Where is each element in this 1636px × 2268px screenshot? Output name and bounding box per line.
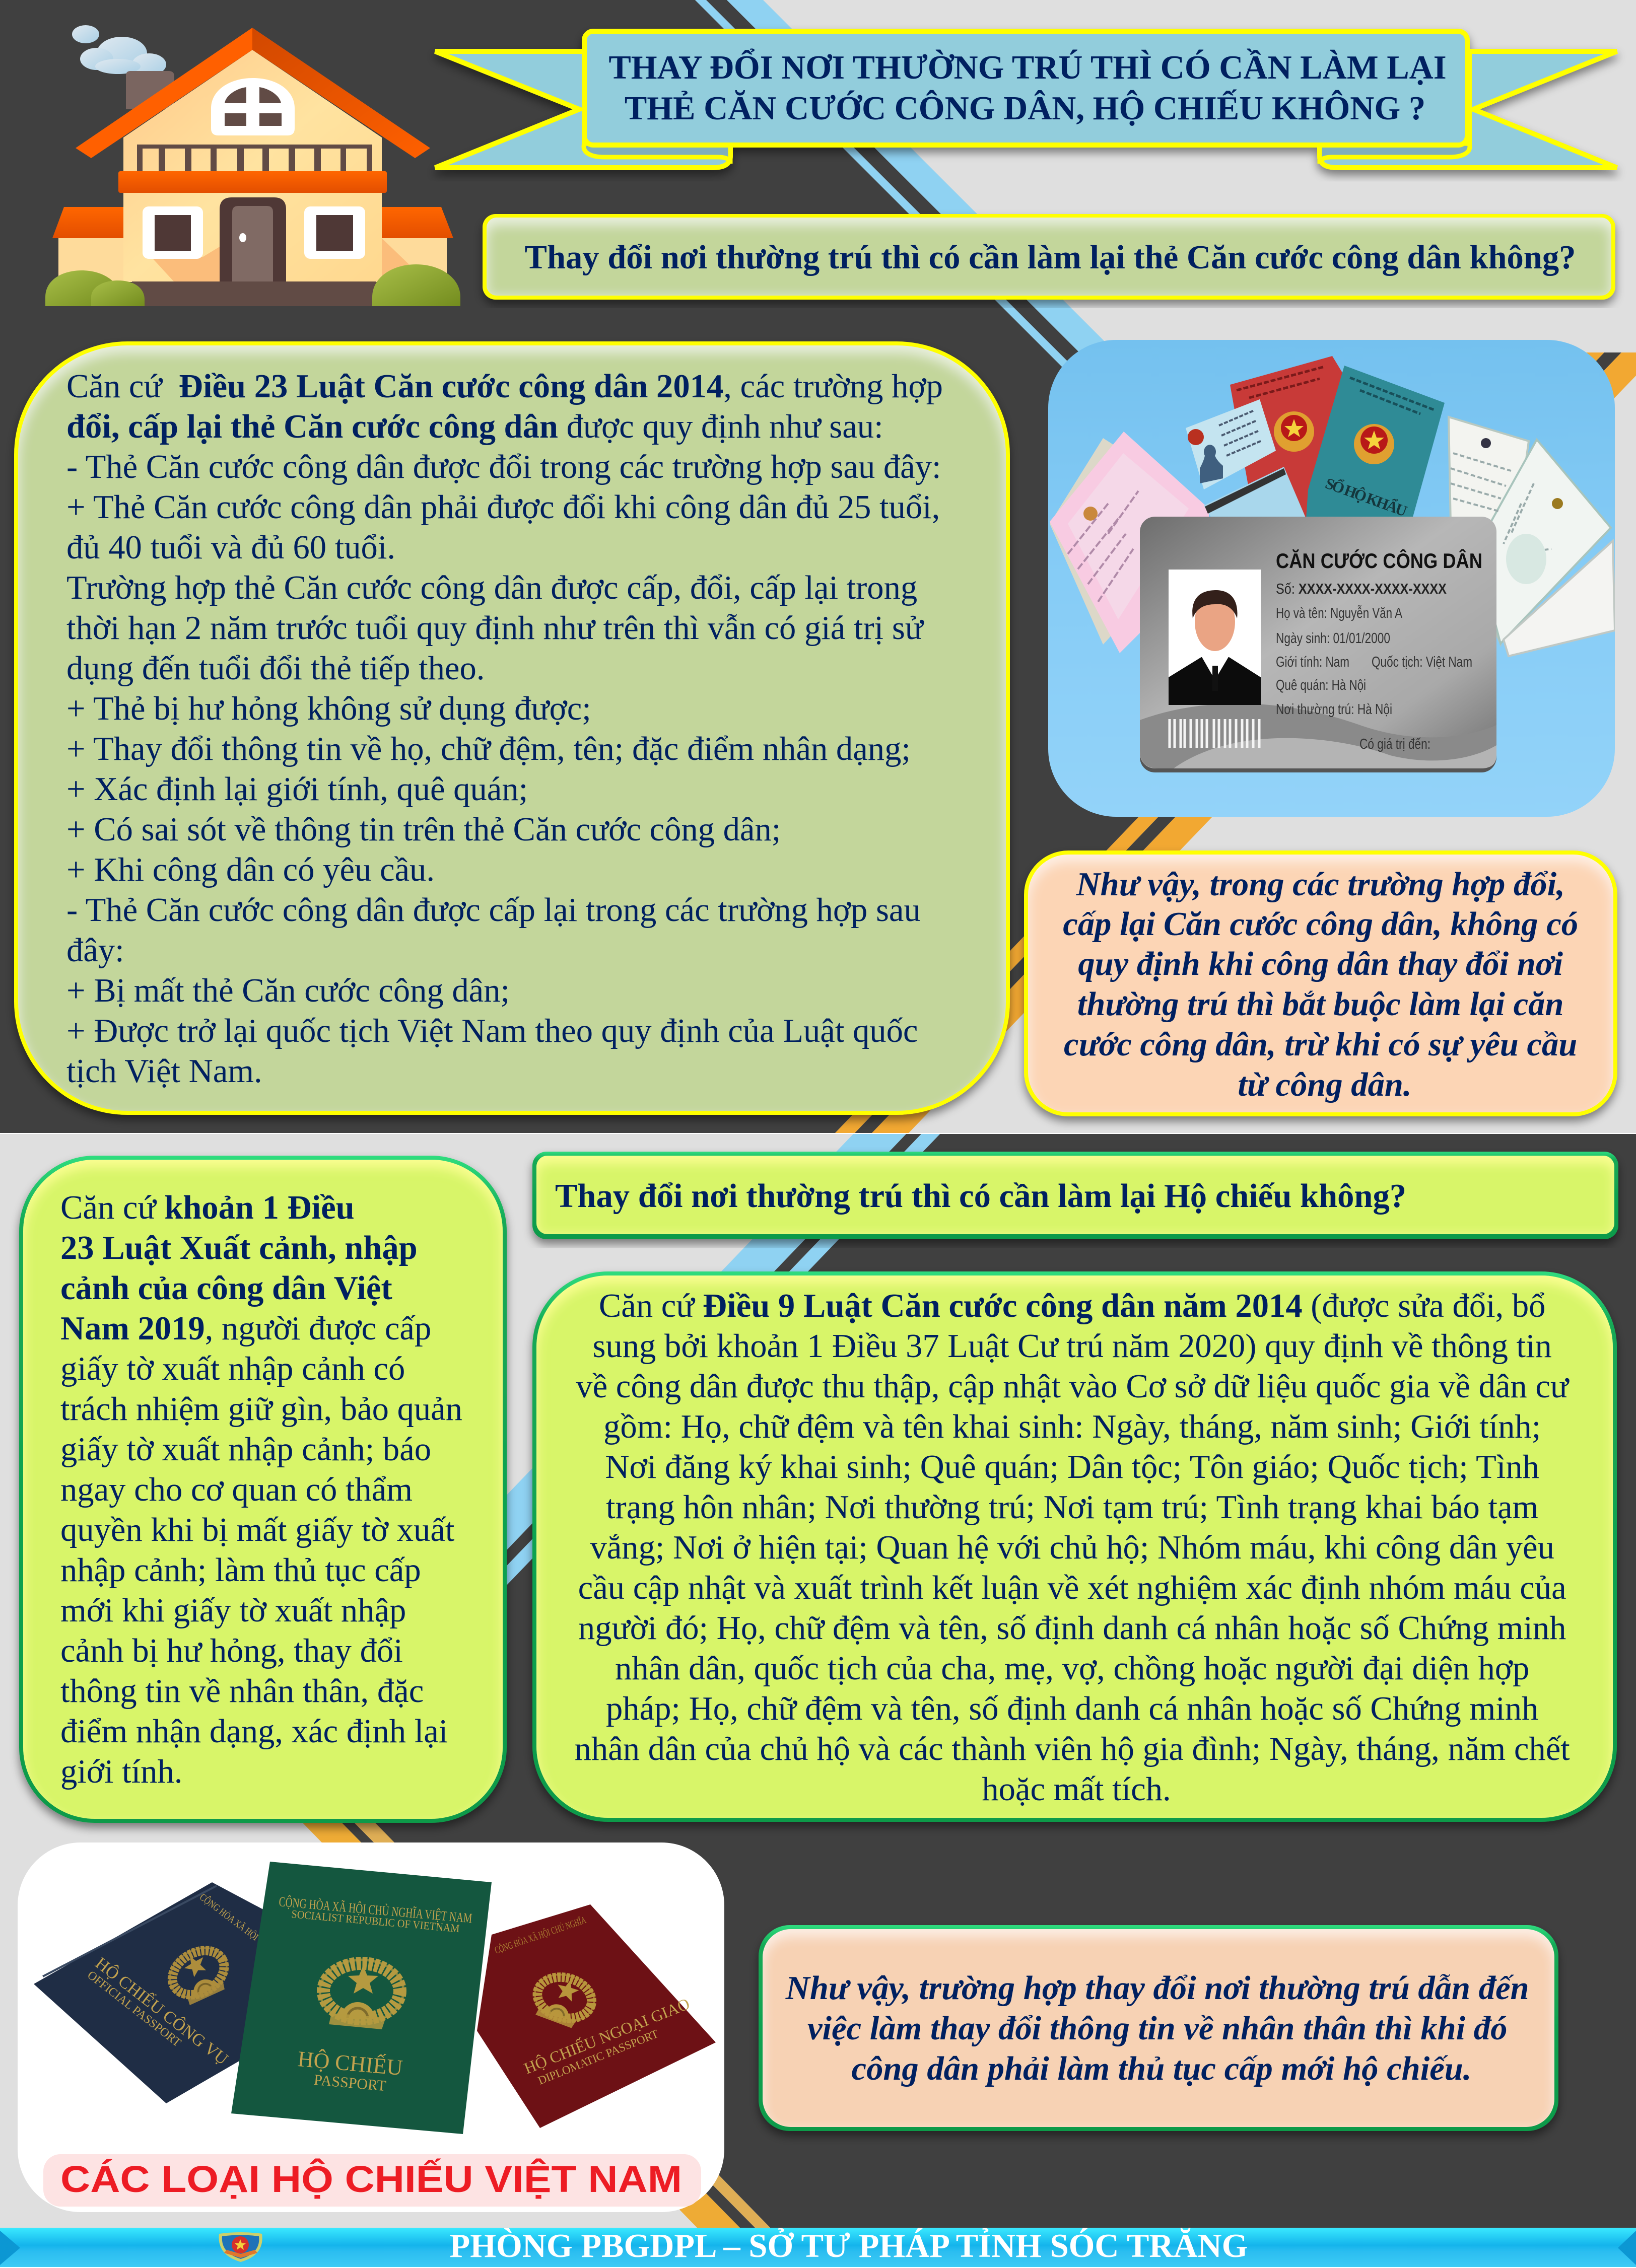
heading: question 1 [483,214,1615,300]
panel: data collected under Article 9: Căn cứ Điều 9 Luật Căn cước công dân năm 2014 (được sửa đổi, bổ [599,1288,1545,1324]
panel: data collected under Article 9: pháp; Họ, chữ đệm và tên, số định danh cá nhân hoặc số Chứng minh [606,1690,1538,1727]
icon: navy official passport: OFFICIAL PASSPORT [85,1968,183,2049]
icon: red diplomatic passport: HỘ CHIẾU NGOẠI GIAO [521,1995,692,2077]
panel: passport legal basis: cảnh bị hư hỏng, thay đổi [60,1633,403,1669]
panel: data collected under Article 9: cầu cập nhật và xuất trình kết luận về xét nghiệm xác định nhóm máu của [578,1570,1566,1606]
panel: data collected under Article 9: nhân dân của chủ hộ và các thành viên hộ gia đình; Ngày, tháng, năm chết [575,1731,1570,1767]
panel: passport legal basis: nhập cảnh; làm thủ tục cấp [60,1552,421,1589]
title text: THAY ĐỔI NƠI THƯỜNG TRÚ THÌ CÓ CẦN LÀM LẠI [608,48,1447,86]
panel: passport legal basis: ngay cho cơ quan có thẩm [60,1471,413,1508]
callout: ID card conclusion: Như vậy, trong các trường hợp đổi, [1076,866,1565,903]
icon: green ordinary passport: HỘ CHIẾU [297,2046,404,2080]
caption: passport types: CÁC LOẠI HỘ CHIẾU VIỆT NAM [60,2158,682,2200]
panel text: tịch Việt Nam. [66,1053,262,1090]
ID card text: Số: XXXX-XXXX-XXXX-XXXX [1276,581,1447,597]
icon: ID portrait [1169,570,1261,705]
heading: question 2 [532,1152,1618,1239]
icon: navy official passport [34,1882,267,2103]
panel text: + Thẻ bị hư hỏng không sử dụng được; [66,690,591,727]
panel: data collected under Article 9: hoặc mất tích. [982,1771,1171,1808]
ID card text: Quê quán: Hà Nội [1276,677,1366,693]
panel: passport legal basis: giới tính. [60,1753,182,1790]
panel: data collected under Article 9: gồm: Họ, chữ đệm và tên khai sinh: Ngày, tháng, năm sinh; Giới tính; [603,1408,1541,1445]
image: citizen ID card and documents [1048,340,1615,817]
panel text: + Bị mất thẻ Căn cước công dân; [66,972,510,1009]
ID card text: Quốc tịch: Việt Nam [1372,654,1472,670]
icon: green ordinary passport: CỘNG HÒA XÃ HỘI CHỦ NGHĨA VIỆT NAM [278,1894,473,1926]
heading: question 2: Thay đổi nơi thường trú thì có cần làm lại Hộ chiếu không? [555,1178,1406,1215]
panel: passport legal basis: thông tin về nhân thân, đặc [60,1673,424,1710]
callout: passport conclusion: công dân phải làm thủ tục cấp mới hộ chiếu. [852,2050,1471,2087]
panel text: thời hạn 2 năm trước tuổi quy định như trên thì vẫn có giá trị sử [66,610,924,647]
ID card text [1276,548,1482,752]
panel text: Trường hợp thẻ Căn cước công dân được cấp, đổi, cấp lại trong [66,570,917,606]
panel: passport legal basis: giấy tờ xuất nhập cảnh; báo [60,1431,431,1468]
icon: balcony railing [137,145,372,172]
panel: data collected under Article 9: về công dân được thu thập, cập nhật vào Cơ sở dữ liệu quốc gia về dân cư [576,1368,1570,1405]
callout: passport conclusion [759,1925,1558,2131]
icon: red diplomatic passport [477,1904,716,2128]
ID card text: Ngày sinh: 01/01/2000 [1276,630,1390,647]
panel: passport legal basis: điểm nhận dạng, xác định lại [60,1713,448,1750]
footer bar [0,2227,1636,2267]
panel: passport legal basis: mới khi giấy tờ xuất nhập [60,1592,406,1629]
callout: passport conclusion: việc làm thay đổi thông tin về nhân thân thì khi đó [807,2010,1507,2047]
panel: passport legal basis: giấy tờ xuất nhập cảnh có [60,1351,405,1387]
panel: passport legal basis: cảnh của công dân Việt [60,1270,392,1307]
panel text: dụng đến tuổi đổi thẻ tiếp theo. [66,650,485,687]
icon: bushes [45,264,460,306]
icon: door [220,197,286,281]
footer text: PHÒNG PBGDPL – SỞ TƯ PHÁP TỈNH SÓC TRĂNG [450,2227,1248,2264]
ID card text: Giới tính: Nam [1276,654,1349,670]
icon: police crest [219,2232,262,2262]
panel: data collected under Article 9: nhân dân, quốc tịch của cha, mẹ, vợ, chồng hoặc người đại diện hợp [615,1650,1529,1687]
callout: ID card conclusion [1024,851,1617,1116]
panel: data collected under Article 9: người đó; Họ, chữ đệm và tên, số định danh cá nhân hoặc số Chứng minh [578,1610,1566,1647]
icon: navy official passport: HỘ CHIẾU CÔNG VỤ [92,1953,232,2069]
panel: passport legal basis: Nam 2019, người được cấp [60,1310,431,1347]
icon: chimney smoke [72,25,166,76]
panel text: + Thẻ Căn cước công dân phải được đổi khi công dân đủ 25 tuổi, [66,489,940,526]
icon: green ordinary passport: SOCIALIST REPUBLIC OF VIETNAM [291,1907,460,1935]
panel: passport legal basis: quyền khi bị mất giấy tờ xuất [60,1512,455,1548]
callout: ID card conclusion: từ công dân. [1238,1067,1412,1103]
ID card text: Họ và tên: Nguyễn Văn A [1276,605,1403,621]
panel text: đây: [66,932,124,969]
panel: legal basis for ID card renewal [14,341,1010,1115]
icon: pink certificates [1050,432,1209,653]
icon: blue identity cards [1186,399,1306,519]
caption: passport types [43,2154,701,2207]
icon: teal household book [1306,366,1445,520]
title text [608,48,1447,127]
panel text: - Thẻ Căn cước công dân được cấp lại trong các trường hợp sau [66,892,921,929]
panel text: + Khi công dân có yêu cầu. [66,852,435,888]
ID card [1140,517,1496,772]
panel text: Căn cứ Điều 23 Luật Căn cước công dân 2014, các trường hợp [66,368,943,405]
panel text: + Thay đổi thông tin về họ, chữ đệm, tên; đặc điểm nhân dạng; [66,731,911,767]
icon: windows [143,206,365,259]
panel text: đủ 40 tuổi và đủ 60 tuổi. [66,529,395,566]
callout: ID card conclusion: thường trú thì bắt buộc làm lại căn [1077,986,1563,1023]
ID card text: CĂN CƯỚC CÔNG DÂN [1276,548,1482,573]
callout: passport conclusion: Như vậy, trường hợp thay đổi nơi thường trú dẫn đến [785,1970,1529,2007]
icon: barcode [1170,719,1259,748]
panel text: - Thẻ Căn cước công dân được đổi trong các trường hợp sau đây: [66,449,941,485]
panel: data collected under Article 9: vắng; Nơi ở hiện tại; Quan hệ với chủ hộ; Nhóm máu, khi công dân yêu [590,1529,1554,1566]
panel: passport legal basis: trách nhiệm giữ gìn, bảo quản [60,1391,462,1428]
panel: data collected under Article 9: sung bởi khoản 1 Điều 37 Luật Cư trú năm 2020) quy định về thông tin [593,1328,1552,1365]
panel: passport legal basis: 23 Luật Xuất cảnh, nhập [60,1230,418,1266]
callout: ID card conclusion: cấp lại Căn cước công dân, không có [1063,906,1578,943]
icon: navy official passport: CỘNG HÒA XÃ HỘI [197,1891,261,1943]
icon: red diplomatic passport: CỘNG HÒA XÃ HỘI CHỦ NGHĨA [493,1913,588,1956]
panel text: đổi, cấp lại thẻ Căn cước công dân được quy định như sau: [66,408,883,445]
panel text: + Xác định lại giới tính, quê quán; [66,771,528,808]
icon: white certificates [1449,417,1615,656]
panel: passport legal basis [19,1156,507,1823]
image: Vietnamese passports [18,1842,724,2212]
panel: data collected under Article 9 [532,1271,1617,1822]
icon: green ordinary passport [231,1862,492,2134]
heading: question 1: Thay đổi nơi thường trú thì có cần làm lại thẻ Căn cước công dân không? [525,239,1576,276]
icon: attic window [211,78,295,135]
panel: data collected under Article 9: trạng hôn nhân; Nơi thường trú; Nơi tạm trú; Tình trạng khai báo tạm [606,1489,1538,1526]
title ribbon [435,31,1617,168]
icon: red diplomatic passport: DIPLOMATIC PASSPORT [536,2027,660,2087]
ID card text: Nơi thường trú: Hà Nội [1276,701,1392,718]
icon: house illustration [45,25,460,306]
panel text: + Có sai sót về thông tin trên thẻ Căn cước công dân; [66,811,781,848]
icon: red household book [1230,356,1344,519]
icon: teal household book: SỔ HỘ KHẨU [1323,474,1410,520]
panel: data collected under Article 9: Nơi đăng ký khai sinh; Quê quán; Dân tộc; Tôn giáo; Quốc tịch; Tình [605,1449,1539,1485]
title text: THẺ CĂN CƯỚC CÔNG DÂN, HỘ CHIẾU KHÔNG ? [625,89,1425,127]
panel: passport legal basis: Căn cứ khoản 1 Điều [60,1189,355,1226]
panel text: + Được trở lại quốc tịch Việt Nam theo quy định của Luật quốc [66,1013,918,1049]
callout: ID card conclusion: cước công dân, trừ khi có sự yêu cầu [1064,1026,1577,1063]
callout: ID card conclusion: quy định khi công dân thay đổi nơi [1078,946,1563,982]
icon: green ordinary passport: PASSPORT [313,2072,387,2094]
ID card text: Có giá trị đến: [1359,736,1430,752]
